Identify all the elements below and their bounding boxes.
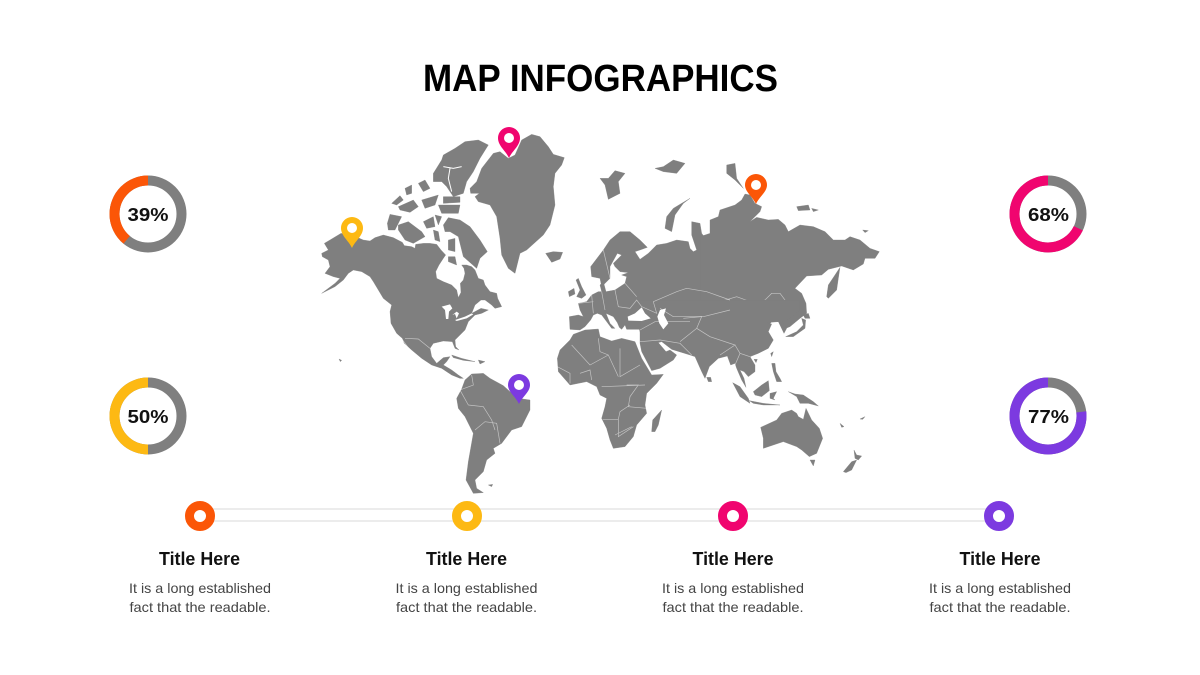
great lakes xyxy=(442,304,473,321)
description xyxy=(129,580,271,615)
sakhalin xyxy=(827,267,840,298)
pin: orange xyxy=(745,174,767,204)
donut: 39% xyxy=(114,180,182,248)
gulf of california xyxy=(401,338,430,353)
south america landmass xyxy=(457,373,530,493)
europe landmass xyxy=(569,222,730,335)
caspian sea xyxy=(657,308,668,329)
donut: 77%: 77% xyxy=(1028,407,1069,427)
pin: purple xyxy=(508,374,530,404)
timeline item 4 xyxy=(929,506,1071,615)
heading: Title Here xyxy=(692,549,774,569)
mainland north america xyxy=(322,233,502,378)
title: MAP INFOGRAPHICS xyxy=(423,58,778,100)
description xyxy=(662,580,804,615)
timeline item 1 xyxy=(129,506,271,615)
pin: pink xyxy=(498,127,520,158)
description: It is a long established xyxy=(129,580,271,596)
description: It is a long established xyxy=(929,580,1071,596)
heading: Title Here xyxy=(960,549,1040,569)
iceland xyxy=(546,252,563,262)
new zealand xyxy=(843,450,862,473)
description: fact that the readable. xyxy=(930,599,1070,615)
australia xyxy=(761,408,823,457)
ellesmere island xyxy=(433,140,488,197)
uk and ireland xyxy=(568,278,586,298)
south asia xyxy=(640,300,800,387)
donut: 77% xyxy=(1014,382,1082,450)
heading: Title Here xyxy=(159,549,240,569)
timeline item 3 xyxy=(662,506,804,615)
map: eurasian arctic islands xyxy=(600,160,743,232)
caribbean islands xyxy=(339,355,485,364)
siberia xyxy=(700,194,879,330)
donut: 50% xyxy=(114,382,182,450)
madagascar xyxy=(652,410,662,432)
japan xyxy=(786,313,810,337)
map: europe and western asia xyxy=(568,222,730,335)
pacific islands xyxy=(840,417,865,427)
description: fact that the readable. xyxy=(130,599,270,615)
pin: yellow xyxy=(341,217,363,248)
donut: 39%: 39% xyxy=(128,205,168,225)
heading: Title Here xyxy=(426,549,507,569)
donut: 68% xyxy=(1014,180,1082,248)
sri lanka, taiwan, hainan and philippines xyxy=(707,352,782,382)
map: south america xyxy=(457,373,530,493)
marker: yellow xyxy=(456,506,478,526)
description xyxy=(396,580,538,615)
map: africa xyxy=(557,329,663,448)
donut: 50%: 50% xyxy=(128,407,168,427)
map: northern and eastern russia xyxy=(700,194,879,330)
world map xyxy=(322,134,879,493)
indonesia and new guinea xyxy=(733,381,818,406)
marker: purple xyxy=(988,506,1010,526)
africa landmass xyxy=(557,329,663,448)
description: It is a long established xyxy=(396,580,538,596)
timeline connector xyxy=(200,508,1000,522)
donut: 68%: 68% xyxy=(1028,205,1069,225)
map: southern and eastern asia xyxy=(640,300,810,387)
description: It is a long established xyxy=(662,580,804,596)
novaya zemlya, svalbard, franz josef and severnaya zemlya xyxy=(600,160,743,232)
description: fact that the readable. xyxy=(396,599,537,615)
map: arctic canada and greenland xyxy=(387,134,564,273)
timeline item 2 xyxy=(396,506,538,615)
description: fact that the readable. xyxy=(662,599,804,615)
canadian arctic islands xyxy=(387,180,487,268)
map: southeast asia and oceania xyxy=(733,381,865,473)
east siberian islands xyxy=(797,205,868,233)
marker: orange xyxy=(190,506,210,526)
tasmania xyxy=(810,460,815,466)
black sea xyxy=(628,307,651,321)
marker: pink xyxy=(722,506,744,526)
map: north america xyxy=(322,233,502,378)
map: europe detail xyxy=(578,250,730,329)
greenland xyxy=(470,134,564,273)
description xyxy=(929,580,1071,615)
